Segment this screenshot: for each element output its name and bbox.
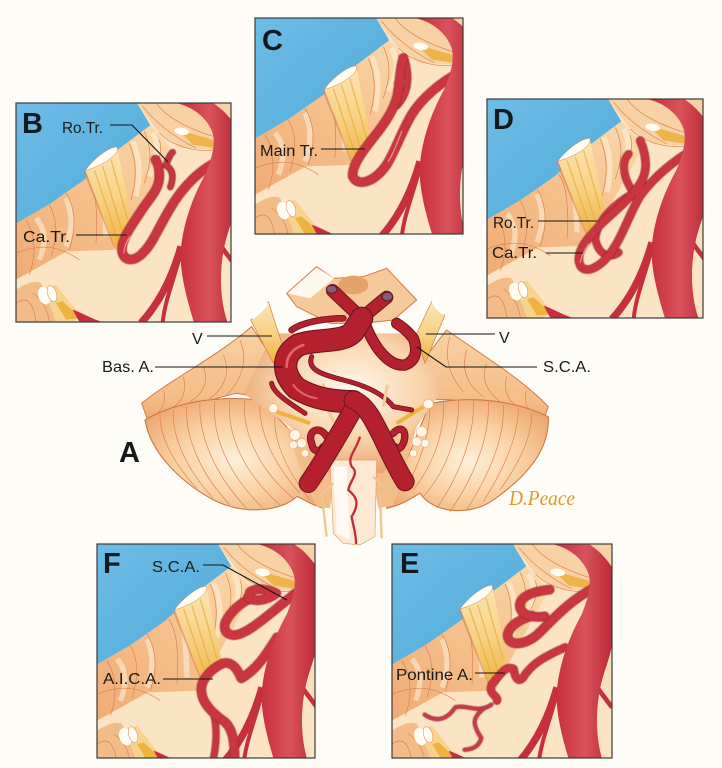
letter E: E	[400, 548, 419, 580]
label: S.C.A.	[152, 559, 287, 600]
pons centre	[243, 333, 440, 473]
letter C: C	[262, 25, 283, 57]
label: Ro. Tr.	[62, 120, 168, 162]
panel F: SCA and AICA	[97, 544, 317, 764]
label: Ca. Tr.: Ca.Tr.	[23, 229, 70, 246]
label: Ro. Tr.	[493, 215, 597, 232]
panel A: central cerebellum and brainstem drawing	[102, 267, 591, 545]
right cerebellar hemisphere	[387, 400, 548, 511]
label: V left: V	[192, 331, 203, 348]
label: Pontine A.	[396, 667, 505, 684]
letter D: D	[493, 104, 514, 136]
icon: medulla	[330, 460, 377, 545]
label: V left	[192, 331, 272, 348]
left superior cerebellar artery	[292, 318, 343, 330]
letter B: B	[22, 108, 43, 140]
right superior cerebellar artery	[365, 323, 416, 365]
midbrain top	[287, 267, 417, 323]
label: Ca. Tr.	[492, 245, 583, 262]
label: V right	[426, 330, 510, 347]
label: V right: V	[499, 330, 510, 347]
label: Main Tr.	[260, 143, 365, 160]
tonsils beside the medulla	[287, 427, 417, 508]
basilar artery	[286, 318, 362, 402]
letter F: F	[103, 548, 121, 580]
letter A: A	[119, 437, 140, 469]
left cerebellar hemisphere	[145, 399, 323, 510]
label: S.C.A.: S.C.A.	[543, 359, 591, 376]
label: A.I.C.A.: A.I.C.A.	[103, 671, 161, 688]
label: S.C.A.: S.C.A.	[152, 559, 200, 576]
panel C: main trunk	[255, 18, 475, 238]
right upper wing	[423, 330, 548, 430]
panel B: rostral and caudal trunks	[16, 103, 236, 323]
label: Ro. Tr.: Ro.Tr.	[493, 215, 534, 232]
nerve V right	[416, 301, 446, 363]
vertebral arteries	[308, 403, 357, 483]
posterior cerebral arteries	[333, 291, 387, 318]
panel D: rostral and caudal trunks, looped	[487, 99, 707, 319]
panel E: pontine artery	[392, 544, 612, 764]
label: S.C.A.	[417, 347, 591, 376]
abducens nerves	[323, 383, 387, 422]
label: Main Tr.: Main Tr.	[260, 143, 318, 160]
left upper wing	[142, 327, 277, 427]
nerve V left	[251, 301, 284, 363]
label: Ro. Tr.: Ro.Tr.	[62, 120, 103, 137]
label: Ca. Tr.: Ca.Tr.	[492, 245, 537, 262]
label: Ca. Tr.	[23, 229, 127, 246]
label: A.I.C.A.	[103, 671, 213, 688]
small loops	[311, 430, 327, 451]
choroid plexus tufts	[269, 399, 433, 457]
signature: D.Peace	[508, 486, 575, 510]
arteries	[272, 285, 416, 483]
thin pontine branches	[311, 357, 412, 410]
label: Bas. A.: Bas. A.	[102, 359, 154, 376]
label: Pontine A.: Pontine A.	[396, 667, 473, 684]
